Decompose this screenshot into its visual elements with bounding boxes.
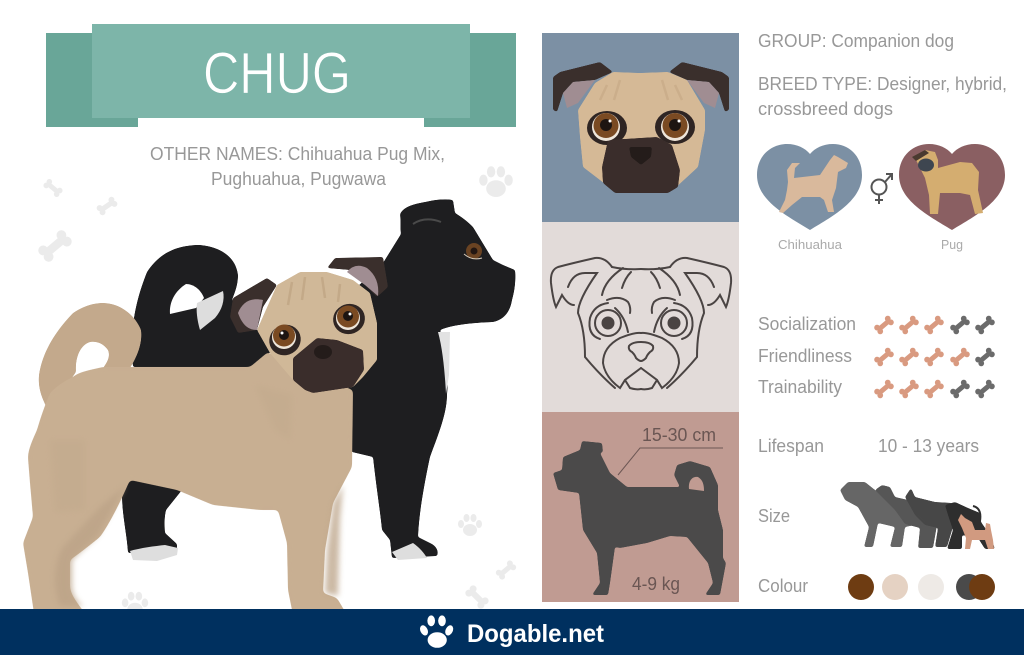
- illustration: black dog: [122, 199, 515, 561]
- tail: [39, 303, 141, 408]
- weight label: 4-9 kg: [632, 574, 680, 594]
- ears: [230, 278, 277, 333]
- ears: [553, 62, 613, 112]
- body: [23, 352, 353, 620]
- head: [578, 72, 705, 190]
- other names: OTHER NAMES: Chihuahua Pug Mix,: [150, 144, 445, 164]
- rating: socialization: [758, 314, 996, 335]
- muzzle: [293, 338, 364, 393]
- size comparison: [758, 482, 995, 549]
- leg shading: [55, 485, 126, 606]
- size comparison: Size: [758, 506, 790, 526]
- eye patches: [264, 319, 306, 361]
- tail tip: [197, 291, 224, 330]
- height label: 15-30 cm: [642, 425, 716, 445]
- group and breed type: BREED TYPE: Designer, hybrid,: [758, 74, 1007, 94]
- parent breed: pug: Pug: [941, 237, 963, 252]
- eye: [466, 243, 482, 259]
- lifespan: 10 - 13 years: [878, 436, 979, 456]
- wrinkles: [288, 277, 340, 305]
- group and breed type: [758, 31, 1007, 119]
- background paws and bones: [36, 166, 517, 616]
- title: CHUG: [203, 41, 351, 106]
- parent breed: chihuahua: Chihuahua: [778, 237, 843, 252]
- parent breed: chihuahua: [757, 144, 862, 252]
- rating: trainability: [758, 377, 996, 399]
- group and breed type: crossbreed dogs: [758, 99, 893, 119]
- lifespan: [758, 436, 979, 456]
- title banner: [46, 24, 516, 127]
- group and breed type: GROUP: Companion dog: [758, 31, 954, 51]
- panel: line art face: [542, 222, 739, 412]
- other names: Pughuahua, Pugwawa: [211, 169, 387, 189]
- panel: colour face: [542, 33, 739, 222]
- brand name: Dogable.net: [467, 620, 605, 648]
- chest patch: [438, 332, 450, 394]
- eyes: [592, 113, 620, 141]
- icon: mixed gender symbol: [872, 174, 892, 204]
- eye patches: [587, 111, 627, 145]
- head: [257, 272, 377, 393]
- paws: [130, 545, 178, 561]
- icon: paw logo: [418, 615, 455, 648]
- tail opening: [170, 284, 204, 314]
- footer bar: [0, 609, 1024, 655]
- parent breed: pug: [899, 144, 1005, 252]
- rating: socialization: Socialization: [758, 314, 856, 334]
- rating: friendliness: Friendliness: [758, 346, 852, 366]
- rating: friendliness: [758, 346, 996, 367]
- panel: silhouette with measurements: [542, 412, 739, 602]
- rating: trainability: Trainability: [758, 377, 842, 397]
- lifespan: Lifespan: [758, 436, 824, 456]
- illustration: fawn dog: [23, 257, 388, 620]
- muzzle: [602, 137, 680, 193]
- colour swatches: [758, 574, 995, 600]
- eyes: [272, 325, 296, 349]
- colour swatches: Colour: [758, 576, 808, 596]
- other names: [150, 144, 445, 189]
